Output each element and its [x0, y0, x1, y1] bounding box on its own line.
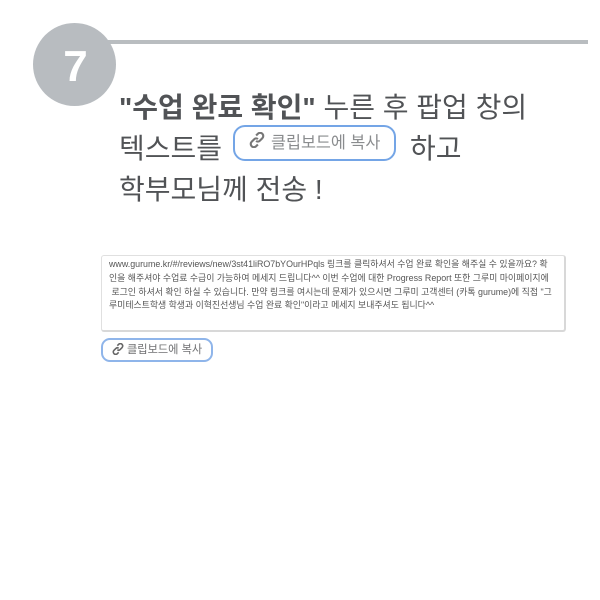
instruction heading line 1: "수업 완료 확인" 누른 후 팝업 창의 — [119, 92, 527, 123]
icon: link — [112, 343, 124, 355]
button label: 클립보드에 복사 — [127, 344, 202, 356]
step number: 7 — [63, 42, 88, 91]
instruction heading line 3: 학부모님께 전송 ! — [119, 174, 323, 205]
message text: 루미테스트학생 학생과 이혁진선생님 수업 완료 확인"이라고 메세지 보내주셔도 됩니다^^ — [109, 300, 434, 310]
message text: 로그인 하셔서 확인 하실 수 있습니다. 만약 링크를 여시는데 문제가 있으시면 그루미 고객센터 (카톡 gurume)에 직접 "그 — [111, 287, 552, 297]
instruction heading line 2 start: 텍스트를 — [119, 133, 222, 164]
step number badge — [33, 23, 116, 106]
copy button — [101, 338, 213, 362]
button label: 클립보드에 복사 — [271, 134, 380, 152]
message text: 인을 해주셔야 수업료 수급이 가능하여 메세지 드립니다^^ 이번 수업에 대한 Progress Report 또한 그루미 마이페이지에 — [109, 273, 549, 283]
message text: www.gurume.kr/#/reviews/new/3st41liRO7bYOurHPqls 링크를 클릭하셔서 수업 완료 확인을 해주실 수 있을까요? 확 — [109, 259, 548, 269]
instruction heading line 2 end: 하고 — [410, 133, 462, 164]
header rule — [100, 40, 588, 44]
icon: link — [250, 132, 264, 148]
message text box — [101, 255, 566, 332]
inline copy button — [233, 125, 396, 161]
message text — [109, 259, 552, 310]
